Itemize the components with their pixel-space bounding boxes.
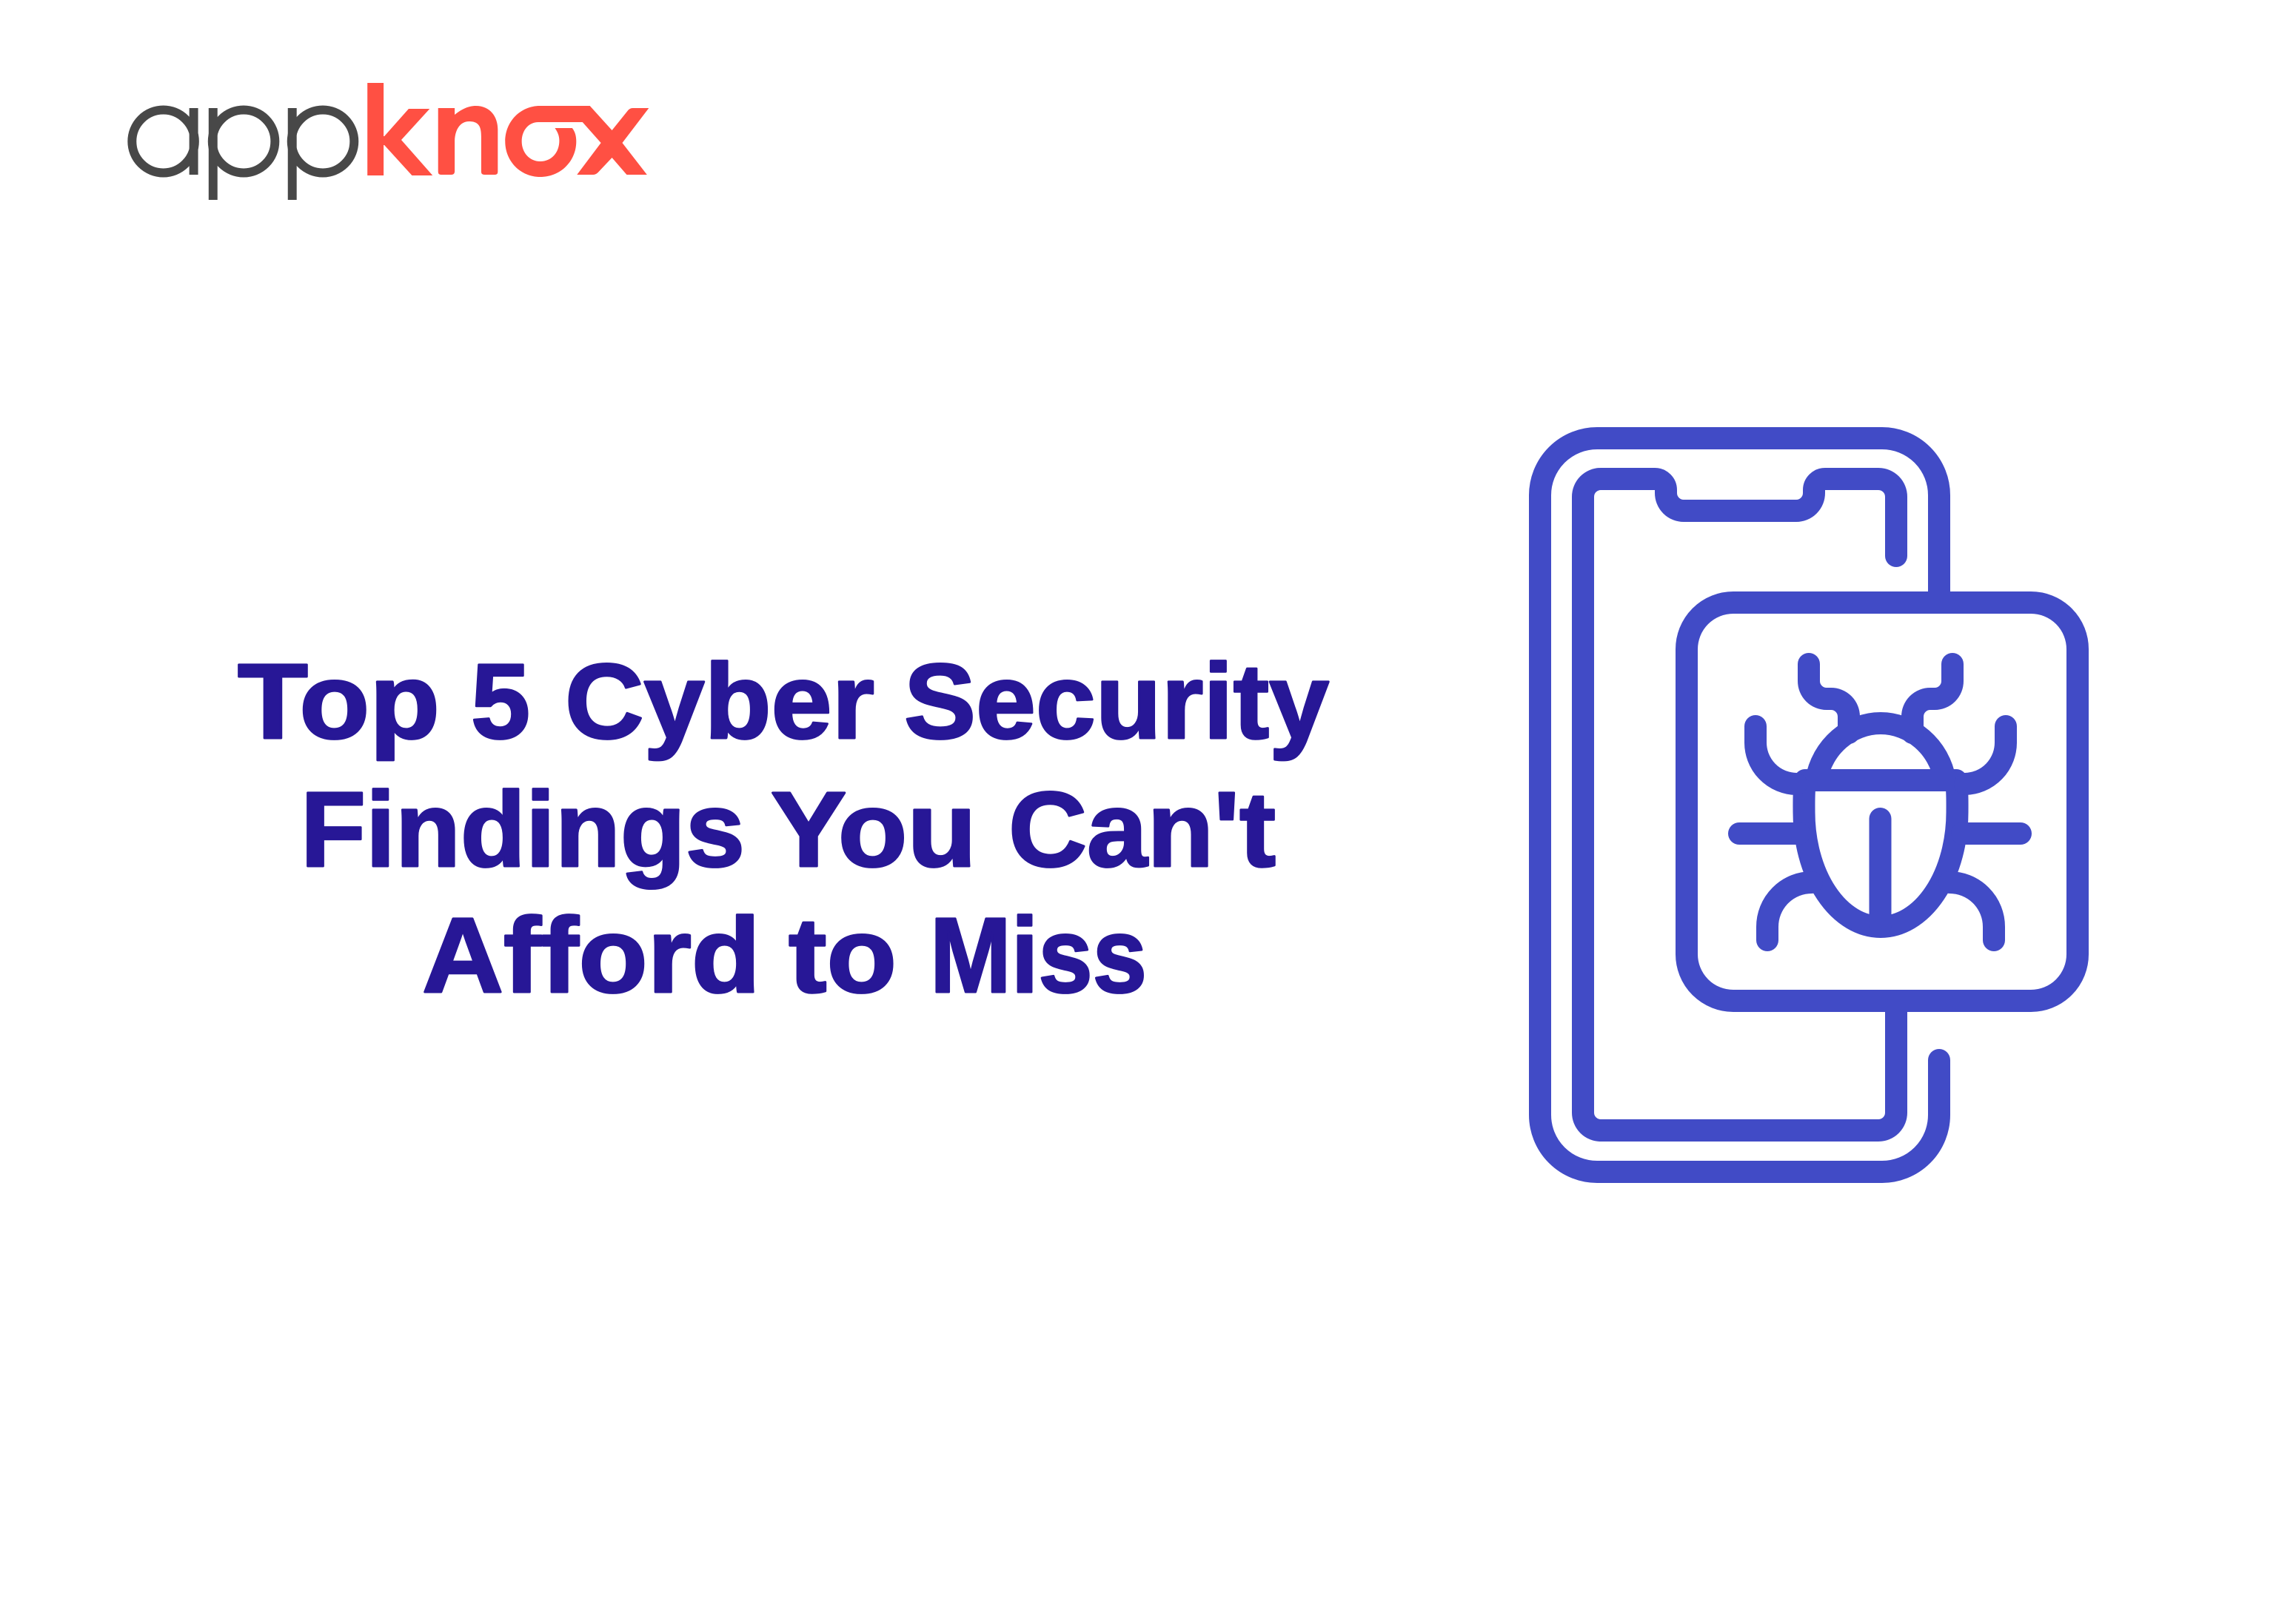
logo letters: app (132, 108, 354, 200)
logo letters: knox (367, 83, 649, 177)
bug centre line (1869, 819, 1891, 925)
icon: phone with bug (1540, 438, 2078, 1172)
bug antennae (1809, 664, 1952, 733)
bug upper legs (1756, 726, 2006, 784)
title line 2: Can't (1008, 770, 1276, 889)
bug (1739, 664, 2021, 940)
title line 2 (301, 770, 1276, 889)
logo: appknox (132, 83, 649, 200)
title line 1: Top (238, 642, 440, 761)
card (1687, 603, 2078, 1001)
title line 2: You (771, 770, 977, 889)
phone outer frame (1540, 438, 1939, 1172)
title line 3: to (789, 896, 897, 1015)
title line 1: Security (904, 642, 1329, 761)
title line 2: Findings (301, 770, 745, 889)
title line 1: 5 (471, 642, 530, 761)
phone inner screen with notch (1583, 479, 1896, 1130)
title line 3: Miss (930, 896, 1147, 1015)
title line 3 (422, 896, 1147, 1015)
title line 1: Cyber (565, 642, 874, 761)
bug lower legs (1767, 882, 1994, 940)
title line 3: Afford (422, 896, 760, 1015)
title line 1 (238, 642, 1329, 761)
bug body (1804, 780, 1958, 927)
title (238, 642, 1329, 1015)
bug head bar (1807, 769, 1954, 791)
bug middle legs (1739, 822, 2021, 845)
bug head dome (1816, 723, 1945, 780)
